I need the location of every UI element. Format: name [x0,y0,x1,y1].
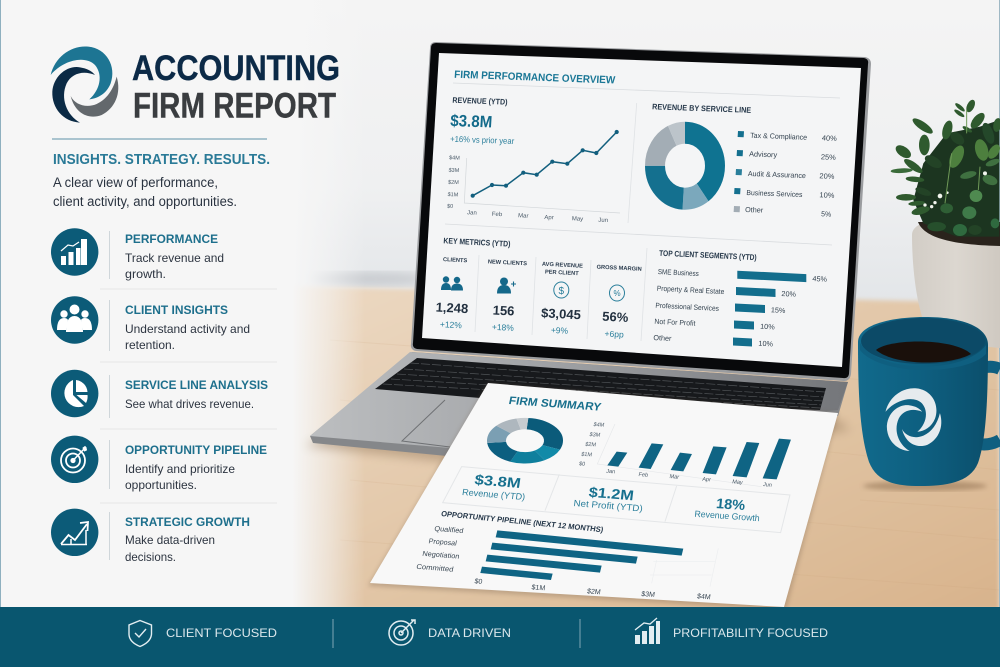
key metrics: +18% [492,322,515,333]
revenue panel: Jan [467,210,477,217]
key metrics: AVG REVENUE [542,262,583,270]
top client segments: 20% [781,289,797,299]
item: service line analysis: SERVICE LINE ANALYSIS [125,378,268,392]
screen title: FIRM PERFORMANCE OVERVIEW [454,69,616,86]
revenue panel: $3M [448,168,460,174]
key metrics: PER CLIENT [545,269,579,277]
key metrics: 1,248 [435,300,469,316]
intro text: A clear view of performance, [53,175,218,190]
top client segments [653,249,828,348]
plant pot [912,220,1000,348]
footer bar [0,607,1000,667]
icon: new client [497,278,516,294]
page bar chart: $0 [578,461,586,468]
page donut [494,422,556,459]
keyboard [375,358,826,410]
top client segments: 10% [760,322,776,331]
key metrics: 156 [492,302,515,319]
item: client insights: CLIENT INSIGHTS [125,303,228,317]
revenue panel: $2M [448,180,459,186]
icon: bars and arrow [635,618,660,644]
icon: dollar [554,282,569,298]
stat boxes: Net Profit (YTD) [573,498,643,514]
laptop screen [411,42,871,381]
opportunity pipeline: Negotiation [422,550,460,561]
icon: pie chart [51,370,98,417]
key metrics: +9% [551,325,569,336]
opportunity pipeline: $1M [531,584,546,592]
revenue panel: $1M [447,192,459,198]
title [132,49,340,125]
item: performance: Track revenue and [125,251,224,265]
page bar chart: Mar [669,474,680,481]
revenue by service line: Tax & Compliance [750,131,807,142]
icon: clients [441,276,463,290]
opportunity pipeline: $4M [696,593,711,601]
opportunity pipeline [416,509,718,601]
opportunity pipeline: OPPORTUNITY PIPELINE (NEXT 12 MONTHS) [440,509,605,534]
stat boxes [443,467,790,533]
wooden desk [280,286,1000,610]
item: service line analysis: See what drives revenue. [125,397,254,411]
revenue by service line: 10% [819,190,835,200]
revenue by service line: 40% [822,133,838,143]
icon: target [51,436,98,483]
top client segments: 15% [771,305,786,315]
key metrics: NEW CLIENTS [488,259,527,267]
laptop base [305,352,850,470]
key metrics: KEY METRICS (YTD) [443,236,511,249]
top client segments: TOP CLIENT SEGMENTS (YTD) [659,249,757,262]
revenue panel: $0 [447,204,453,210]
title: FIRM REPORT [133,86,336,125]
revenue panel: +16% vs prior year [450,134,515,146]
stat boxes: $1.2M [588,484,635,503]
icon: dollar: $ [559,286,565,297]
title: ACCOUNTING [132,49,340,88]
intro text [53,175,237,209]
opportunity pipeline: Qualified [434,525,464,535]
opportunity pipeline: $2M [586,588,601,596]
item: performance [51,228,224,281]
icon: percent [610,285,624,301]
revenue by service line [652,102,838,219]
page bar chart: $1M [581,452,593,458]
page bar chart: May [732,479,743,486]
opportunity pipeline: $3M [641,591,655,599]
key metrics: GROSS MARGIN [596,265,642,273]
item: service line analysis [51,370,268,417]
opportunity pipeline: Proposal [428,537,458,548]
key metrics [435,236,642,339]
stat boxes: 18% [715,495,747,513]
item: strategic growth: STRATEGIC GROWTH [125,515,250,529]
tagline: INSIGHTS. STRATEGY. RESULTS. [53,152,270,168]
icon: people [51,296,98,344]
revenue panel: Jun [598,218,608,224]
key metrics: +12% [440,319,463,330]
item: strategic growth [51,509,250,564]
revenue by service line: Other [745,205,764,215]
page bar chart: Feb [638,472,649,479]
opportunity pipeline: Committed [416,563,454,574]
stat boxes: Revenue Growth [694,509,760,523]
firm summary title: FIRM SUMMARY [508,395,603,414]
page bar chart: Jun [762,482,772,489]
footer bar: CLIENT FOCUSED [166,626,277,640]
footer bar: DATA DRIVEN [428,626,511,640]
mug logo [886,388,941,451]
item: opportunity pipeline: OPPORTUNITY PIPELINE [125,443,267,457]
item: client insights: Understand activity and [125,322,250,336]
revenue by service line: 20% [819,171,835,181]
icon: percent: % [613,289,621,298]
item: opportunity pipeline [51,436,267,492]
top client segments: 45% [812,274,828,284]
revenue panel: $3.8M [450,111,493,132]
icon: shield [129,620,152,646]
key metrics: +6pp [604,329,624,339]
logo [51,47,118,123]
item: client insights: retention. [125,338,175,352]
revenue panel: Mar [518,213,529,220]
revenue by service line: Audit & Assurance [748,169,806,180]
revenue panel: Apr [544,215,554,221]
stat boxes: $3.8M [474,471,522,491]
opportunity pipeline: $0 [474,578,483,586]
key metrics: $3,045 [541,305,581,322]
wall shadow behind laptop [310,272,430,286]
icon: bar chart [51,228,98,276]
left panel fade [0,0,365,610]
item: strategic growth: decisions. [125,550,176,564]
revenue panel [447,96,620,224]
revenue by service line: Business Services [746,188,803,199]
item: client insights [51,296,250,352]
top client segments: Property & Real Estate [657,284,725,296]
stat boxes: Revenue (YTD) [461,487,526,502]
page bar chart: $2M [585,442,597,448]
page bar chart: Jan [606,469,616,475]
item: performance: PERFORMANCE [125,232,218,246]
coffee mug [858,317,1000,491]
page bar chart [578,422,791,489]
revenue panel: Feb [492,212,503,218]
background wall [0,0,1000,310]
key metrics: 56% [602,309,629,325]
mug handle [974,367,1000,444]
footer bar: PROFITABILITY FOCUSED [673,626,828,640]
line chart [471,130,619,198]
top client segments: Professional Services [655,301,720,313]
top client segments: SME Business [658,267,699,278]
printed report page [368,383,838,610]
page bar chart: $4M [593,422,605,429]
header rule [52,138,267,140]
item: opportunity pipeline: opportunities. [125,478,197,492]
revenue by service line: REVENUE BY SERVICE LINE [652,102,752,115]
donut chart [655,133,715,199]
revenue panel: REVENUE (YTD) [452,96,508,107]
icon: target [389,620,415,645]
page bar chart: $3M [589,432,601,439]
item: opportunity pipeline: Identify and prioritize [125,462,235,476]
top client segments: Other [653,333,672,343]
icon: growth arrow [51,509,98,556]
revenue panel: May [572,216,583,223]
revenue by service line: 5% [821,209,832,219]
revenue by service line: Advisory [749,149,778,159]
page bar chart: Apr [702,477,711,483]
top client segments: Not For Profit [654,317,696,328]
intro text: client activity, and opportunities. [53,194,237,209]
item: strategic growth: Make data-driven [125,533,215,547]
item: performance: growth. [125,267,166,281]
revenue by service line: 25% [821,152,837,162]
key metrics: CLIENTS [443,257,468,264]
top client segments: 10% [758,339,774,348]
trackpad [402,400,450,447]
revenue panel: $4M [449,155,460,162]
plant [891,98,1000,237]
